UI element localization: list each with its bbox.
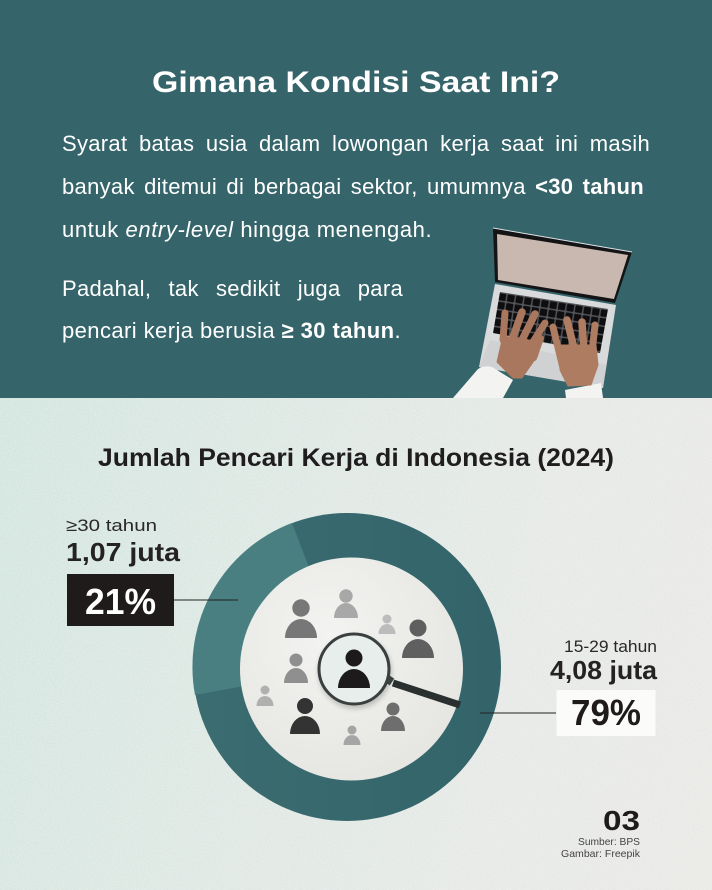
intro paragraph: untuk entry-level hingga menengah.	[62, 217, 432, 242]
donut chart	[192, 513, 501, 821]
screen	[493, 228, 632, 303]
page number: 03	[603, 805, 640, 836]
chart heading: Jumlah Pencari Kerja di Indonesia (2024)	[98, 444, 614, 472]
label: 15-29 age group	[480, 637, 658, 736]
second paragraph: Padahal, tak sedikit juga para	[62, 276, 403, 301]
title: Gimana Kondisi Saat Ini?	[152, 66, 560, 99]
right hand	[553, 320, 598, 386]
left hand	[497, 312, 545, 378]
value box: 21%: 21%	[85, 581, 156, 622]
label: 30 plus age group	[66, 516, 238, 626]
panel: context background	[0, 0, 712, 398]
keyboard	[493, 292, 608, 353]
segment: 15-29 tahun 79%	[193, 513, 501, 821]
second paragraph: pencari kerja berusia ≥ 30 tahun.	[62, 318, 401, 343]
laptop base	[479, 284, 616, 388]
second paragraph	[62, 276, 403, 343]
intro paragraph	[62, 131, 650, 242]
sleeves	[453, 366, 513, 398]
icon: laptop with typing hands	[453, 228, 632, 398]
label: 30 plus age group: 1,07 juta	[66, 537, 181, 567]
label: 15-29 age group: 4,08 juta	[550, 655, 658, 685]
icon: magnifying glass	[318, 634, 460, 709]
value box: 79%: 79%	[571, 692, 641, 733]
label: 15-29 age group: 15-29 tahun	[564, 637, 657, 656]
credits: Gambar: Freepik	[561, 848, 641, 860]
panel: chart background	[0, 398, 712, 890]
credits: Sumber: BPS	[578, 836, 640, 848]
background grain	[0, 398, 712, 890]
value box: 21%	[67, 574, 174, 626]
value box: 79%	[556, 690, 656, 736]
intro paragraph: Syarat batas usia dalam lowongan kerja saat ini masih	[62, 131, 650, 156]
label: 30 plus age group: ≥30 tahun	[66, 516, 157, 535]
icon: people	[256, 589, 434, 745]
centre disc	[240, 558, 463, 780]
segment: 30+ tahun 21%	[192, 523, 347, 695]
credits	[561, 836, 641, 860]
intro paragraph: banyak ditemui di berbagai sektor, umumnya <30 tahun	[62, 174, 644, 199]
